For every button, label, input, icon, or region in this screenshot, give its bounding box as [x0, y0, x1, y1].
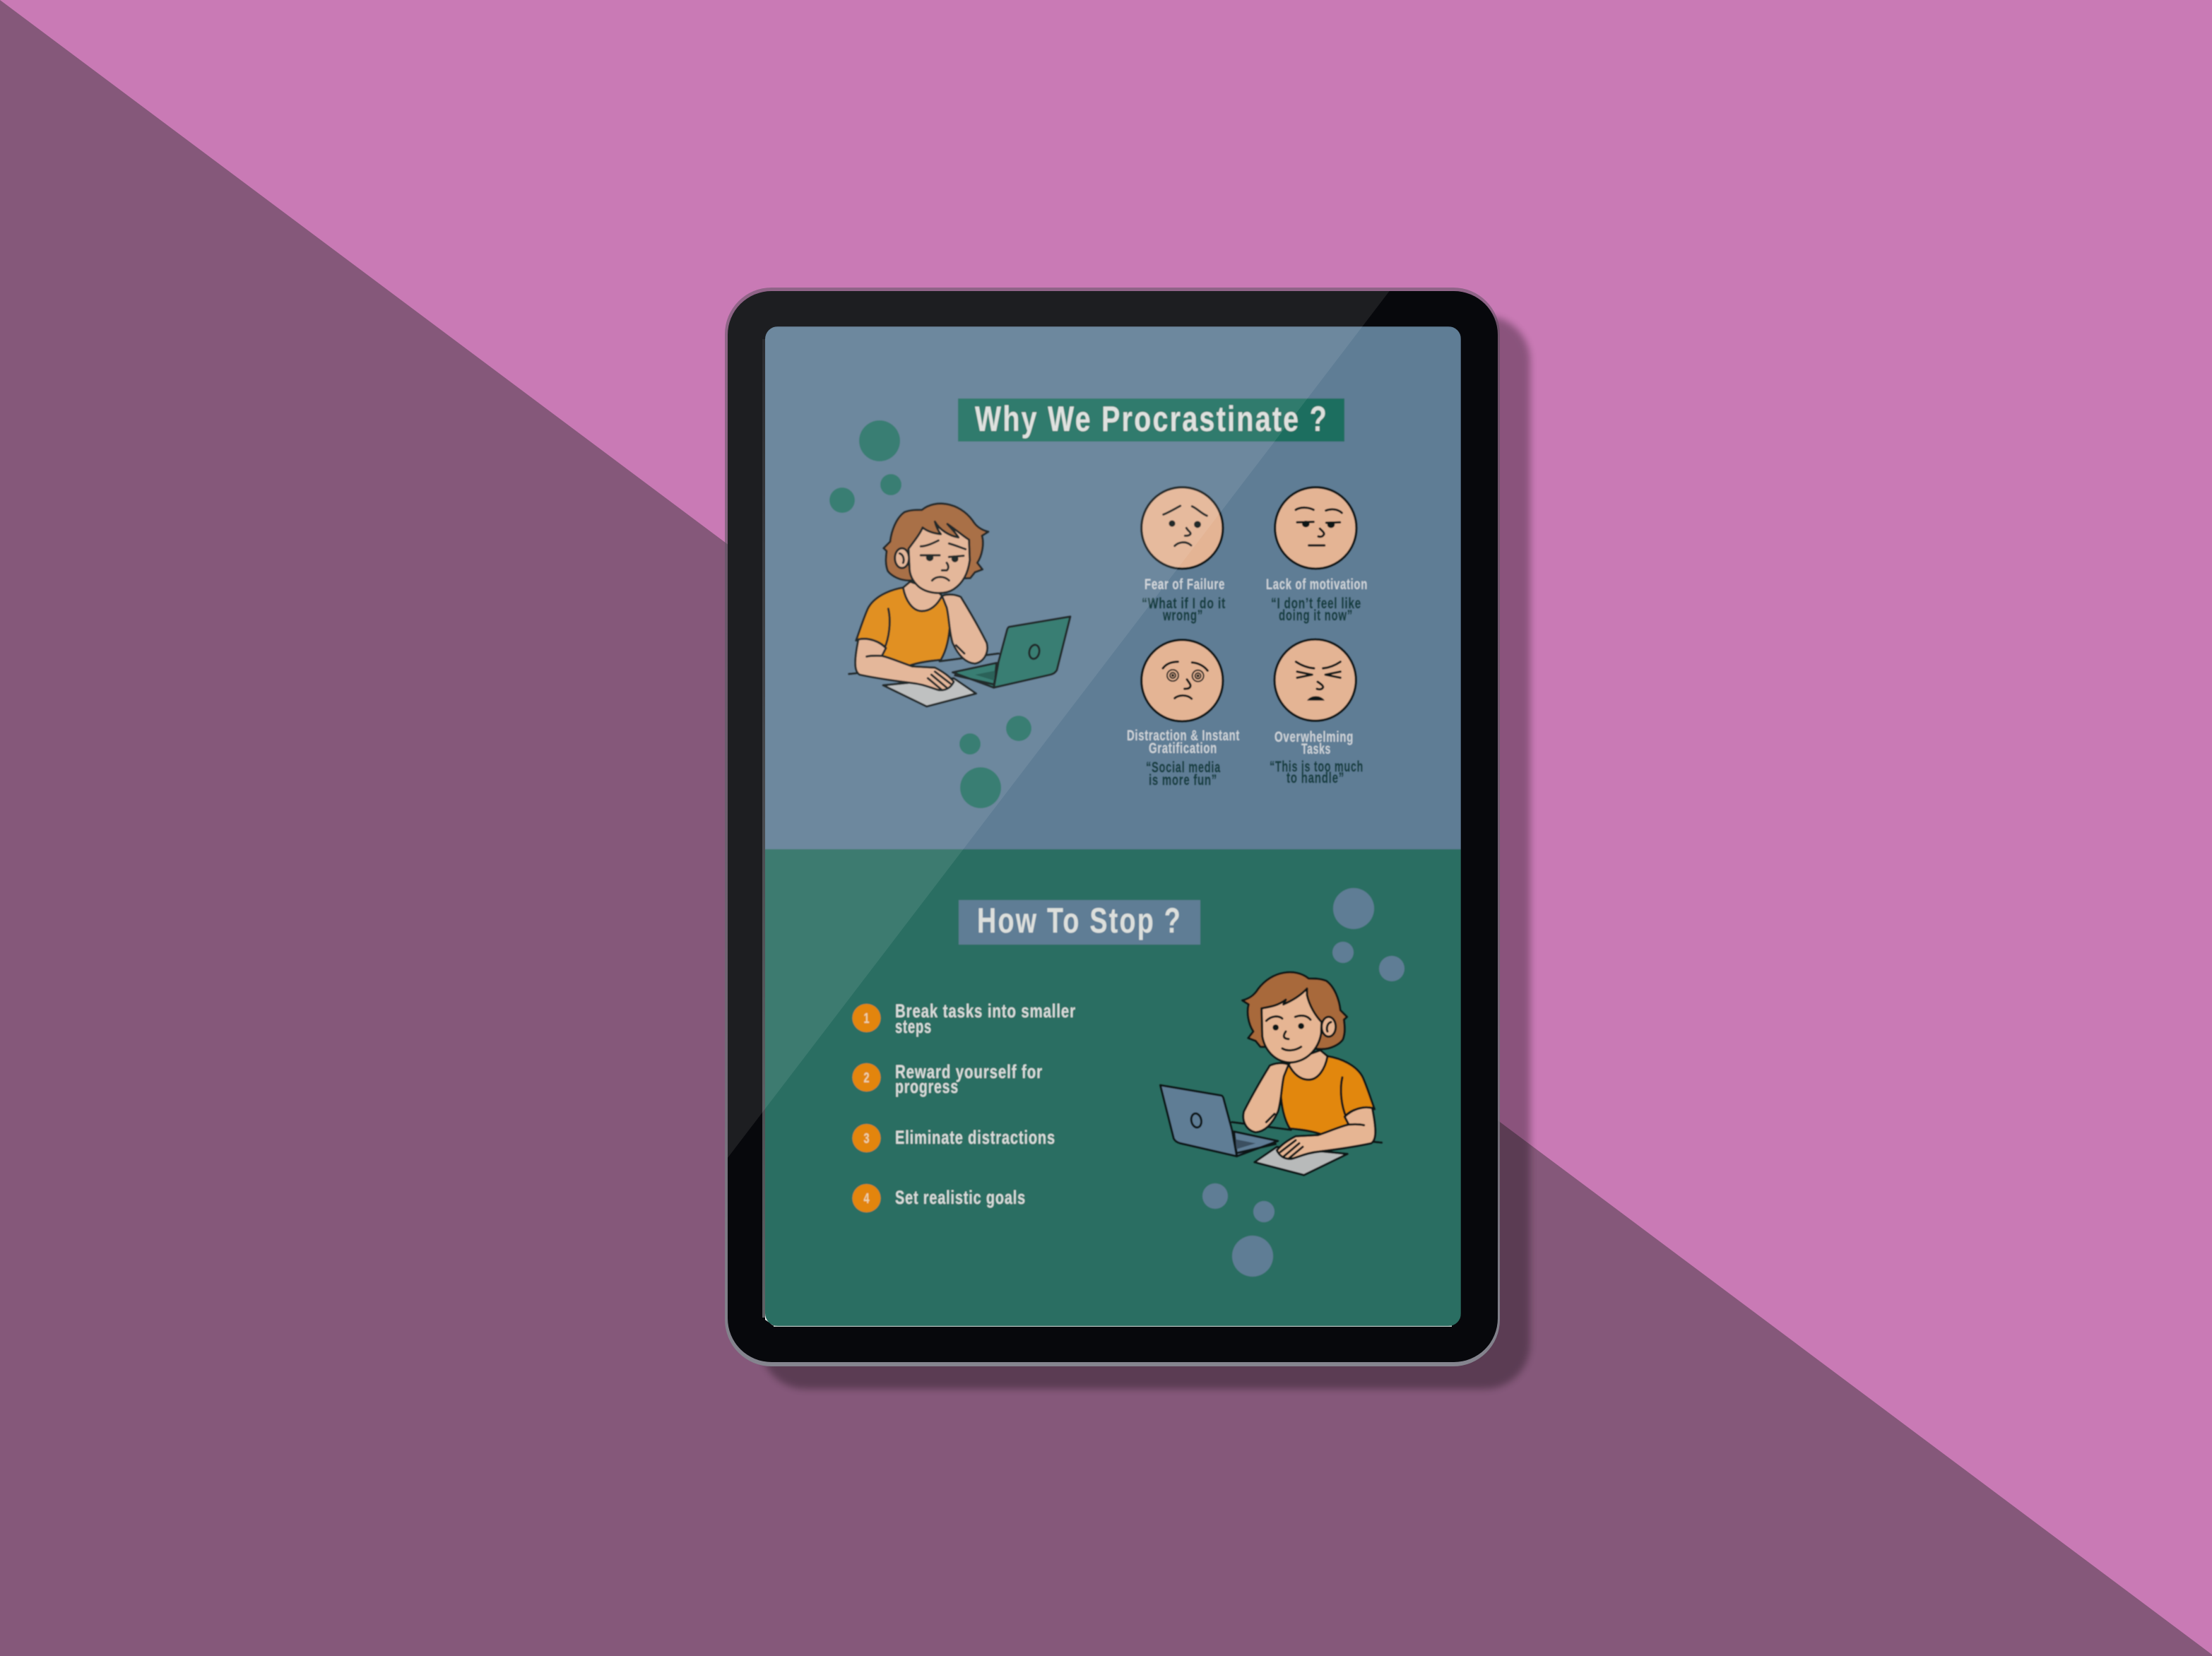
step 1: steps — [895, 1016, 932, 1037]
step 2: Reward yourself for — [895, 1061, 1043, 1082]
tablet metal edge — [725, 288, 1500, 1366]
cause text: overwhelming tasks: Tasks — [1301, 741, 1331, 757]
screen inner left edge — [762, 339, 766, 1318]
cause text: lack of motivation: “I don’t feel like — [1271, 596, 1361, 612]
panel: how to stop — [764, 849, 1461, 1326]
cause text: overwhelming tasks: Overwhelming — [1274, 729, 1354, 745]
face: overwhelmed — [1274, 639, 1356, 721]
step 2: 2 — [863, 1070, 869, 1086]
cause text: fear of failure: Fear of Failure — [1145, 576, 1225, 593]
step 1 — [852, 1000, 1076, 1037]
step 3 — [852, 1124, 1055, 1152]
screen — [764, 326, 1461, 1326]
face: fear of failure — [1142, 487, 1223, 569]
panel: why we procrastinate — [764, 326, 1461, 850]
cause text: distraction: Gratification — [1149, 740, 1217, 757]
cause text: fear of failure: wrong” — [1162, 608, 1203, 624]
heading: how to stop: How To Stop ? — [977, 901, 1182, 940]
cause text: overwhelming tasks — [1270, 729, 1364, 786]
step 4: Set realistic goals — [895, 1187, 1026, 1208]
cause text: lack of motivation: Lack of motivation — [1266, 576, 1368, 593]
step 4 — [852, 1184, 1026, 1212]
cause text: fear of failure: “What if I do it — [1142, 596, 1226, 612]
illustration: worried person at laptop — [849, 504, 1070, 706]
face: lack of motivation — [1275, 487, 1356, 569]
cause text: overwhelming tasks: to handle” — [1287, 770, 1344, 786]
cause text: distraction: Distraction & Instant — [1127, 728, 1240, 744]
step 3: Eliminate distractions — [895, 1127, 1055, 1148]
step 4: 4 — [863, 1191, 870, 1207]
cause text: distraction: is more fun” — [1149, 772, 1217, 788]
cause text: overwhelming tasks: “This is too much — [1270, 759, 1364, 775]
tablet frame — [728, 291, 1498, 1362]
screen bottom edge — [774, 1325, 1452, 1327]
step 2 — [852, 1061, 1043, 1097]
heading: how to stop — [959, 900, 1200, 945]
heading: why we procrastinate: Why We Procrastinate ? — [975, 399, 1328, 439]
cause text: distraction: “Social media — [1146, 759, 1221, 776]
decorative bubbles bottom — [1202, 888, 1404, 1277]
step 1: 1 — [863, 1011, 869, 1027]
cause text: lack of motivation: doing it now” — [1279, 608, 1353, 624]
cause text: lack of motivation — [1266, 576, 1368, 624]
cause text: distraction — [1127, 728, 1240, 788]
glass glare — [721, 286, 1393, 1167]
step 1: Break tasks into smaller — [895, 1000, 1076, 1022]
step 2: progress — [895, 1076, 959, 1097]
decorative bubbles top — [829, 420, 1031, 808]
cause text: fear of failure — [1142, 576, 1226, 624]
step 3: 3 — [863, 1131, 869, 1147]
screen corner sliver — [765, 1313, 774, 1326]
tablet shadow — [760, 316, 1530, 1389]
illustration: happy person at laptop — [1160, 972, 1382, 1175]
face: distraction — [1142, 640, 1223, 721]
